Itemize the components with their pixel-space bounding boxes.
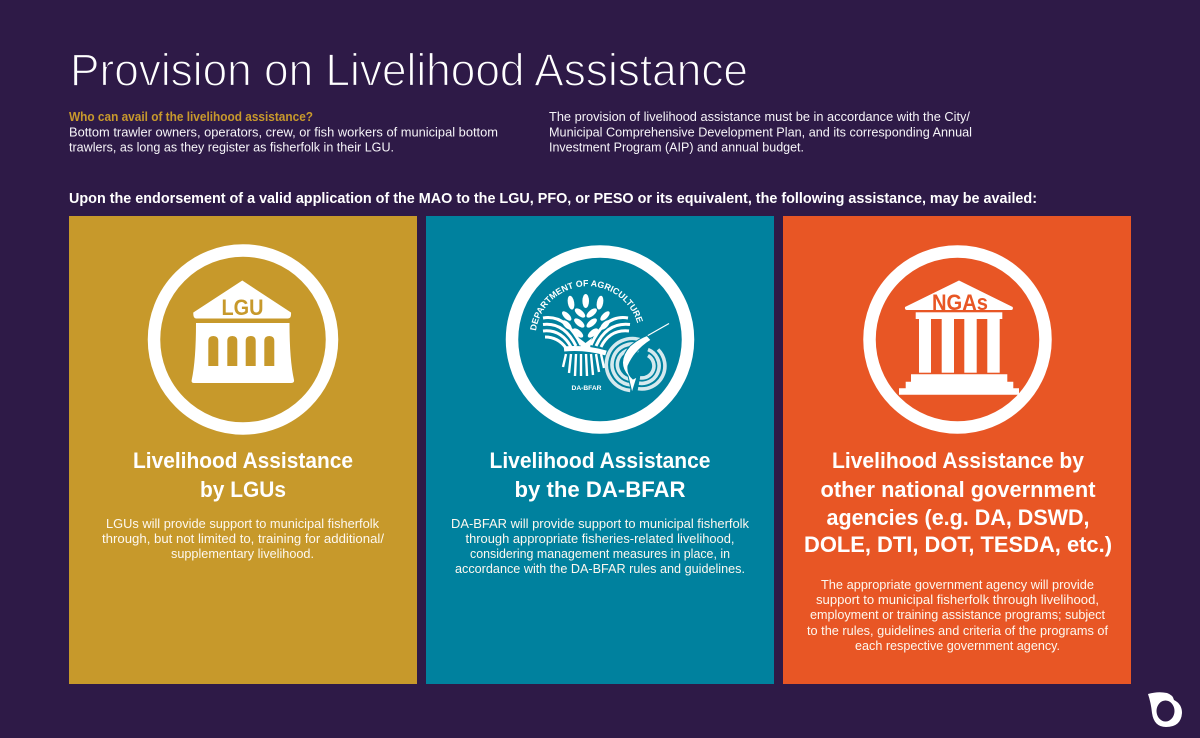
text block: who can avail: Who can avail of the livelihood assistance? [69, 110, 313, 124]
heading: by DA-BFAR: Livelihood Assistance [490, 448, 710, 473]
text: DA-BFAR description: considering management measures in place, in [470, 547, 730, 561]
heading: by LGUs [133, 448, 353, 502]
subheading: Upon the endorsement of a valid application of the MAO to the LGU, PFO, or PESO or its equivalent, the following assistance, may be availed: [69, 190, 1037, 207]
text block: accordance with plan [549, 110, 972, 154]
text: NGA description: employment or training assistance programs; subject [810, 608, 1106, 622]
text block: accordance with plan: Municipal Comprehensive Development Plan, and its corresponding Annual [549, 126, 972, 140]
icon: corner logo [1148, 692, 1182, 727]
heading: by other national agencies: other national government [820, 477, 1096, 502]
icon: DA-BFAR seal [506, 245, 694, 434]
text: LGU description: through, but not limited to, training for additional/ [102, 532, 385, 546]
heading: by other national agencies: Livelihood Assistance by [832, 448, 1085, 473]
wheat sheaf and stems [543, 318, 630, 376]
text: NGA description: The appropriate government agency will provide [821, 578, 1094, 592]
heading: by other national agencies [804, 448, 1112, 557]
panel: DA-BFAR [426, 216, 774, 684]
icon: DA-BFAR seal: DEPARTMENT OF AGRICULTURE [530, 280, 643, 330]
icon: LGU building: LGU [222, 295, 264, 320]
icon: NGAs building [870, 252, 1046, 428]
text: DA-BFAR description: DA-BFAR will provide support to municipal fisherfolk [451, 517, 750, 531]
text block: who can avail: Bottom trawler owners, operators, crew, or fish workers of municipal bottom [69, 126, 498, 140]
text: NGA description: support to municipal fisherfolk through livelihood, [816, 593, 1099, 607]
text block: accordance with plan: Investment Program (AIP) and annual budget. [549, 140, 804, 154]
wheat grains [560, 294, 611, 348]
text block: accordance with plan: The provision of livelihood assistance must be in accordance with the City/ [549, 110, 971, 124]
DA-BFAR seal label: DA-BFAR [572, 385, 602, 392]
text: DA-BFAR description [451, 517, 750, 576]
heading: by DA-BFAR [490, 448, 710, 502]
panel: national government agencies [783, 216, 1131, 684]
heading: by LGUs: by LGUs [200, 477, 286, 502]
title: Provision on Livelihood Assistance [70, 44, 748, 96]
text block: who can avail: trawlers, as long as they register as fisherfolk in their LGU. [69, 140, 394, 154]
icon: NGAs building: NGAs [932, 290, 988, 315]
text: DA-BFAR description: through appropriate fisheries-related livelihood, [466, 532, 734, 546]
text: DA-BFAR description: accordance with the DA-BFAR rules and guidelines. [455, 562, 745, 576]
text: LGU description: LGUs will provide support to municipal fisherfolk [106, 517, 380, 531]
icon: LGU building [154, 250, 332, 428]
heading: by other national agencies: DOLE, DTI, DOT, TESDA, etc.) [804, 532, 1112, 557]
heading: by other national agencies: agencies (e.g. DA, DSWD, [826, 505, 1090, 530]
text block: who can avail [69, 110, 498, 154]
text: NGA description [807, 578, 1109, 653]
text: NGA description: to the rules, guidelines and criteria of the programs of [807, 624, 1109, 638]
text: LGU description: supplementary livelihood. [171, 547, 314, 561]
text: NGA description: each respective government agency. [855, 639, 1060, 653]
heading: by DA-BFAR: by the DA-BFAR [514, 477, 686, 502]
text: LGU description [102, 517, 385, 561]
marlin emblem [606, 324, 669, 393]
heading: by LGUs: Livelihood Assistance [133, 448, 353, 473]
panel: LGUs [69, 216, 417, 684]
